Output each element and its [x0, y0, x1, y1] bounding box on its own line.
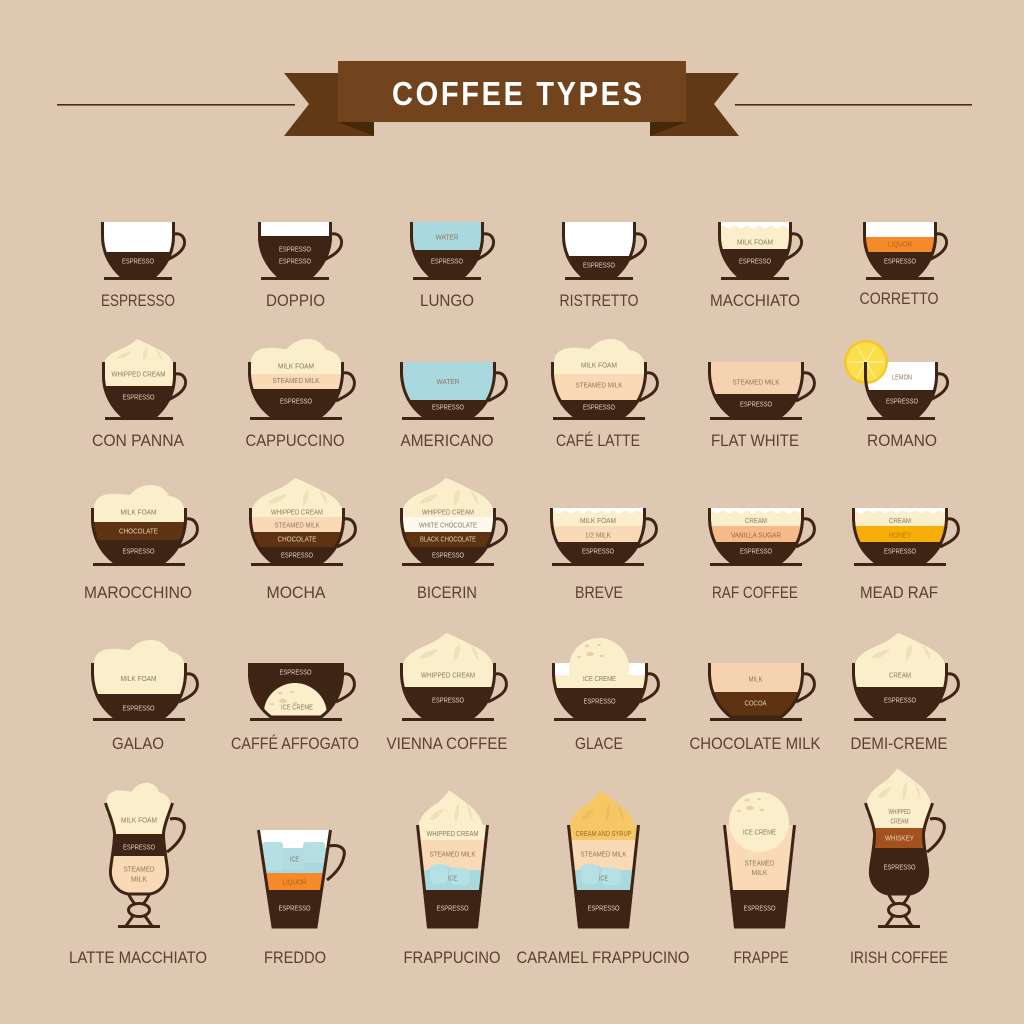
name: MAROCCHINO	[84, 584, 192, 602]
glass: CREAM	[890, 817, 909, 826]
glass: ESPRESSO	[436, 904, 469, 913]
coffee: macchiato	[710, 222, 802, 310]
cup	[852, 508, 958, 564]
cup: ESPRESSO	[886, 397, 918, 406]
cup: MILK FOAM	[581, 361, 617, 370]
cup: STEAMED MILK	[272, 376, 320, 385]
coffee: espresso	[101, 222, 185, 310]
cup: CREAM	[889, 671, 911, 680]
cup: ESPRESSO	[122, 257, 154, 266]
left rule	[57, 104, 295, 106]
name: CAFFÉ AFFOGATO	[231, 734, 359, 753]
cup: ESPRESSO	[582, 547, 614, 556]
cup	[551, 339, 657, 418]
cup	[708, 508, 814, 564]
cup: CREAM	[889, 516, 911, 525]
ice cream scoop	[729, 792, 789, 852]
cup: ESPRESSO	[279, 245, 311, 254]
name: CAPPUCCINO	[246, 432, 345, 450]
cup: ESPRESSO	[739, 257, 771, 266]
name: GLACE	[575, 735, 623, 753]
coffee: americano	[400, 362, 506, 450]
cup	[718, 222, 802, 278]
name: CARAMEL FRAPPUCINO	[516, 949, 690, 967]
coffee: caffe affogato	[231, 663, 359, 753]
coffee: ristretto	[560, 222, 646, 310]
cup: ESPRESSO	[884, 547, 916, 556]
right rule	[735, 104, 972, 106]
coffee: glace	[552, 638, 658, 753]
coffee: con panna	[92, 339, 186, 450]
cup: VANILLA SUGAR	[731, 531, 781, 540]
glass: ICE	[448, 874, 457, 883]
name: FREDDO	[264, 949, 326, 967]
glass: STEAMED	[124, 865, 154, 874]
coffee: frappe	[723, 792, 796, 967]
cup	[708, 362, 814, 418]
cup: MILK FOAM	[580, 516, 616, 525]
cup: ESPRESSO	[584, 697, 616, 706]
cup	[248, 663, 354, 720]
cup: ESPRESSO	[432, 696, 464, 705]
cup: CHOCOLATE	[278, 535, 317, 544]
title: COFFEE TYPES	[392, 75, 642, 112]
cup: MILK	[748, 675, 763, 684]
cup: ESPRESSO	[122, 704, 155, 713]
cup: COCOA	[744, 699, 767, 708]
cup	[863, 222, 947, 278]
coffee: freddo	[257, 830, 344, 967]
glass: ESPRESSO	[744, 904, 776, 913]
cup: ESPRESSO	[122, 393, 155, 402]
coffee: chocolate milk	[690, 663, 820, 753]
cup: ESPRESSO	[280, 397, 312, 406]
glass: STEAMED MILK	[430, 850, 476, 859]
cup: WHITE CHOCOLATE	[419, 521, 477, 530]
coffee: lungo	[410, 222, 494, 310]
glass: WHISKEY	[885, 834, 914, 843]
cup	[102, 339, 186, 418]
name: BREVE	[575, 584, 623, 602]
glass: ESPRESSO	[588, 904, 620, 913]
coffee: galao	[91, 640, 197, 753]
glass	[864, 768, 944, 926]
glass	[723, 792, 796, 928]
ribbon left fold	[338, 122, 374, 136]
cup: ICE CREME	[583, 674, 616, 683]
glass	[416, 790, 489, 928]
cup: ESPRESSO	[740, 547, 772, 556]
icon: lemon slice	[844, 340, 888, 384]
cup	[400, 362, 506, 418]
glass	[567, 790, 640, 928]
name: LUNGO	[420, 292, 474, 310]
infographic canvas	[57, 61, 972, 963]
glass: ESPRESSO	[884, 863, 916, 872]
glass: ICE	[599, 874, 608, 883]
cup: STEAMED MILK	[576, 381, 623, 390]
coffee: caramel frappucino	[516, 790, 690, 967]
cup	[552, 638, 658, 720]
cup: ESPRESSO	[122, 547, 155, 556]
glass: MILK	[752, 868, 768, 877]
cup: MILK FOAM	[278, 362, 314, 371]
coffee: vienna coffee	[386, 633, 508, 753]
cup: ESPRESSO	[431, 257, 463, 266]
cup	[400, 478, 506, 564]
cup	[550, 508, 656, 564]
cup: MILK FOAM	[737, 238, 773, 247]
glass	[257, 830, 344, 928]
cup	[852, 633, 958, 720]
ribbon centre	[338, 61, 686, 122]
glass: WHIPPED	[888, 807, 910, 816]
ribbon right tail	[650, 73, 739, 136]
coffee: irish coffee	[850, 768, 948, 967]
cup: ICE CREME	[281, 703, 313, 712]
cup: 1/2 MILK	[585, 531, 611, 540]
coffee: mocha	[249, 478, 355, 602]
cup: MILK FOAM	[120, 674, 157, 683]
name: LATTE MACCHIATO	[69, 949, 207, 967]
cup: STEAMED MILK	[732, 378, 780, 387]
cup: CREAM	[745, 516, 767, 525]
cup: ESPRESSO	[583, 403, 615, 412]
cup	[410, 222, 494, 278]
name: RISTRETTO	[560, 292, 639, 310]
glass: ICE	[290, 855, 299, 864]
cup: WATER	[436, 233, 458, 242]
cup	[400, 633, 506, 720]
glass: MILK FOAM	[121, 816, 157, 825]
glass: STEAMED	[744, 859, 774, 868]
glass	[104, 783, 184, 926]
glass: MILK	[131, 875, 147, 884]
coffee: corretto	[860, 222, 947, 308]
cup	[91, 640, 197, 720]
name: FRAPPUCINO	[404, 949, 501, 967]
name: RAF COFFEE	[712, 584, 798, 602]
name: AMERICANO	[400, 432, 494, 450]
coffee: flat white	[708, 362, 814, 450]
ribbon left tail	[284, 73, 374, 136]
cup: ESPRESSO	[279, 257, 311, 266]
cup: BLACK CHOCOLATE	[420, 535, 476, 544]
cup: WATER	[436, 377, 460, 386]
glass: STEAMED MILK	[580, 850, 627, 859]
cup: WHIPPED CREAM	[271, 508, 323, 517]
coffee: romano	[844, 340, 948, 450]
glass: ESPRESSO	[278, 904, 311, 913]
coffee: cafe latte	[551, 339, 657, 450]
glass: CREAM AND SYRUP	[576, 829, 632, 838]
coffee: marocchino	[84, 485, 197, 602]
glass: ESPRESSO	[123, 843, 155, 852]
cup: ESPRESSO	[583, 261, 615, 270]
name: ROMANO	[867, 432, 937, 450]
cup	[91, 485, 197, 564]
name: GALAO	[112, 735, 164, 753]
name: MACCHIATO	[710, 292, 800, 310]
cup	[249, 478, 355, 564]
cup: ESPRESSO	[281, 551, 313, 560]
cup: ESPRESSO	[740, 400, 772, 409]
name: MEAD RAF	[860, 584, 938, 602]
cup	[248, 339, 354, 418]
name: CORRETTO	[860, 290, 939, 308]
coffee: breve	[550, 508, 656, 602]
cup: WHIPPED CREAM	[422, 508, 474, 517]
cup: WHIPPED CREAM	[112, 370, 166, 379]
coffee: bicerin	[400, 478, 506, 602]
name: CAFÉ LATTE	[556, 431, 640, 450]
ribbon right fold	[650, 122, 686, 136]
glass: ICE CREME	[743, 828, 776, 837]
name: FRAPPE	[734, 949, 788, 967]
glass: LIQUOR	[282, 878, 306, 887]
cup: ESPRESSO	[432, 403, 464, 412]
name: ESPRESSO	[101, 292, 175, 310]
cup	[844, 340, 948, 418]
cup: STEAMED MILK	[274, 521, 320, 530]
cup: LEMON	[892, 373, 912, 382]
name: VIENNA COFFEE	[386, 735, 508, 753]
glass: WHIPPED CREAM	[426, 829, 479, 838]
coffee: frappucino	[404, 790, 501, 967]
cup: ESPRESSO	[280, 668, 312, 677]
name: CHOCOLATE MILK	[690, 735, 820, 753]
coffee: demi-creme	[850, 633, 958, 753]
cup: ESPRESSO	[432, 551, 464, 560]
name: CON PANNA	[92, 432, 184, 450]
cup: WHIPPED CREAM	[421, 671, 475, 680]
cup: HONEY	[888, 531, 912, 540]
coffee: cappuccino	[246, 339, 354, 450]
name: DOPPIO	[266, 292, 325, 310]
name: BICERIN	[417, 584, 477, 602]
coffee: raf coffee	[708, 508, 814, 602]
cup: LIQUOR	[888, 240, 912, 249]
title banner	[57, 61, 972, 136]
cup: CHOCOLATE	[119, 527, 158, 536]
coffee: latte macchiato	[69, 783, 207, 967]
name: MOCHA	[266, 584, 326, 602]
name: FLAT WHITE	[711, 432, 799, 450]
cup	[708, 663, 814, 720]
cup: ESPRESSO	[884, 696, 916, 705]
name: DEMI-CREME	[850, 735, 948, 753]
cup: MILK FOAM	[120, 508, 157, 517]
cup: ESPRESSO	[884, 257, 916, 266]
name: IRISH COFFEE	[850, 949, 948, 967]
coffee: doppio	[258, 222, 342, 310]
coffee: mead raf	[852, 508, 958, 602]
cup	[258, 222, 342, 278]
